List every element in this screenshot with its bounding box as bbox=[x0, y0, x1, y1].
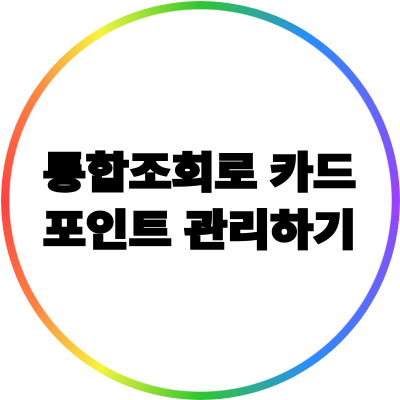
title line 1: 통합조회로 카드 bbox=[43, 150, 356, 196]
title line 2: 포인트 관리하기 bbox=[43, 207, 356, 254]
